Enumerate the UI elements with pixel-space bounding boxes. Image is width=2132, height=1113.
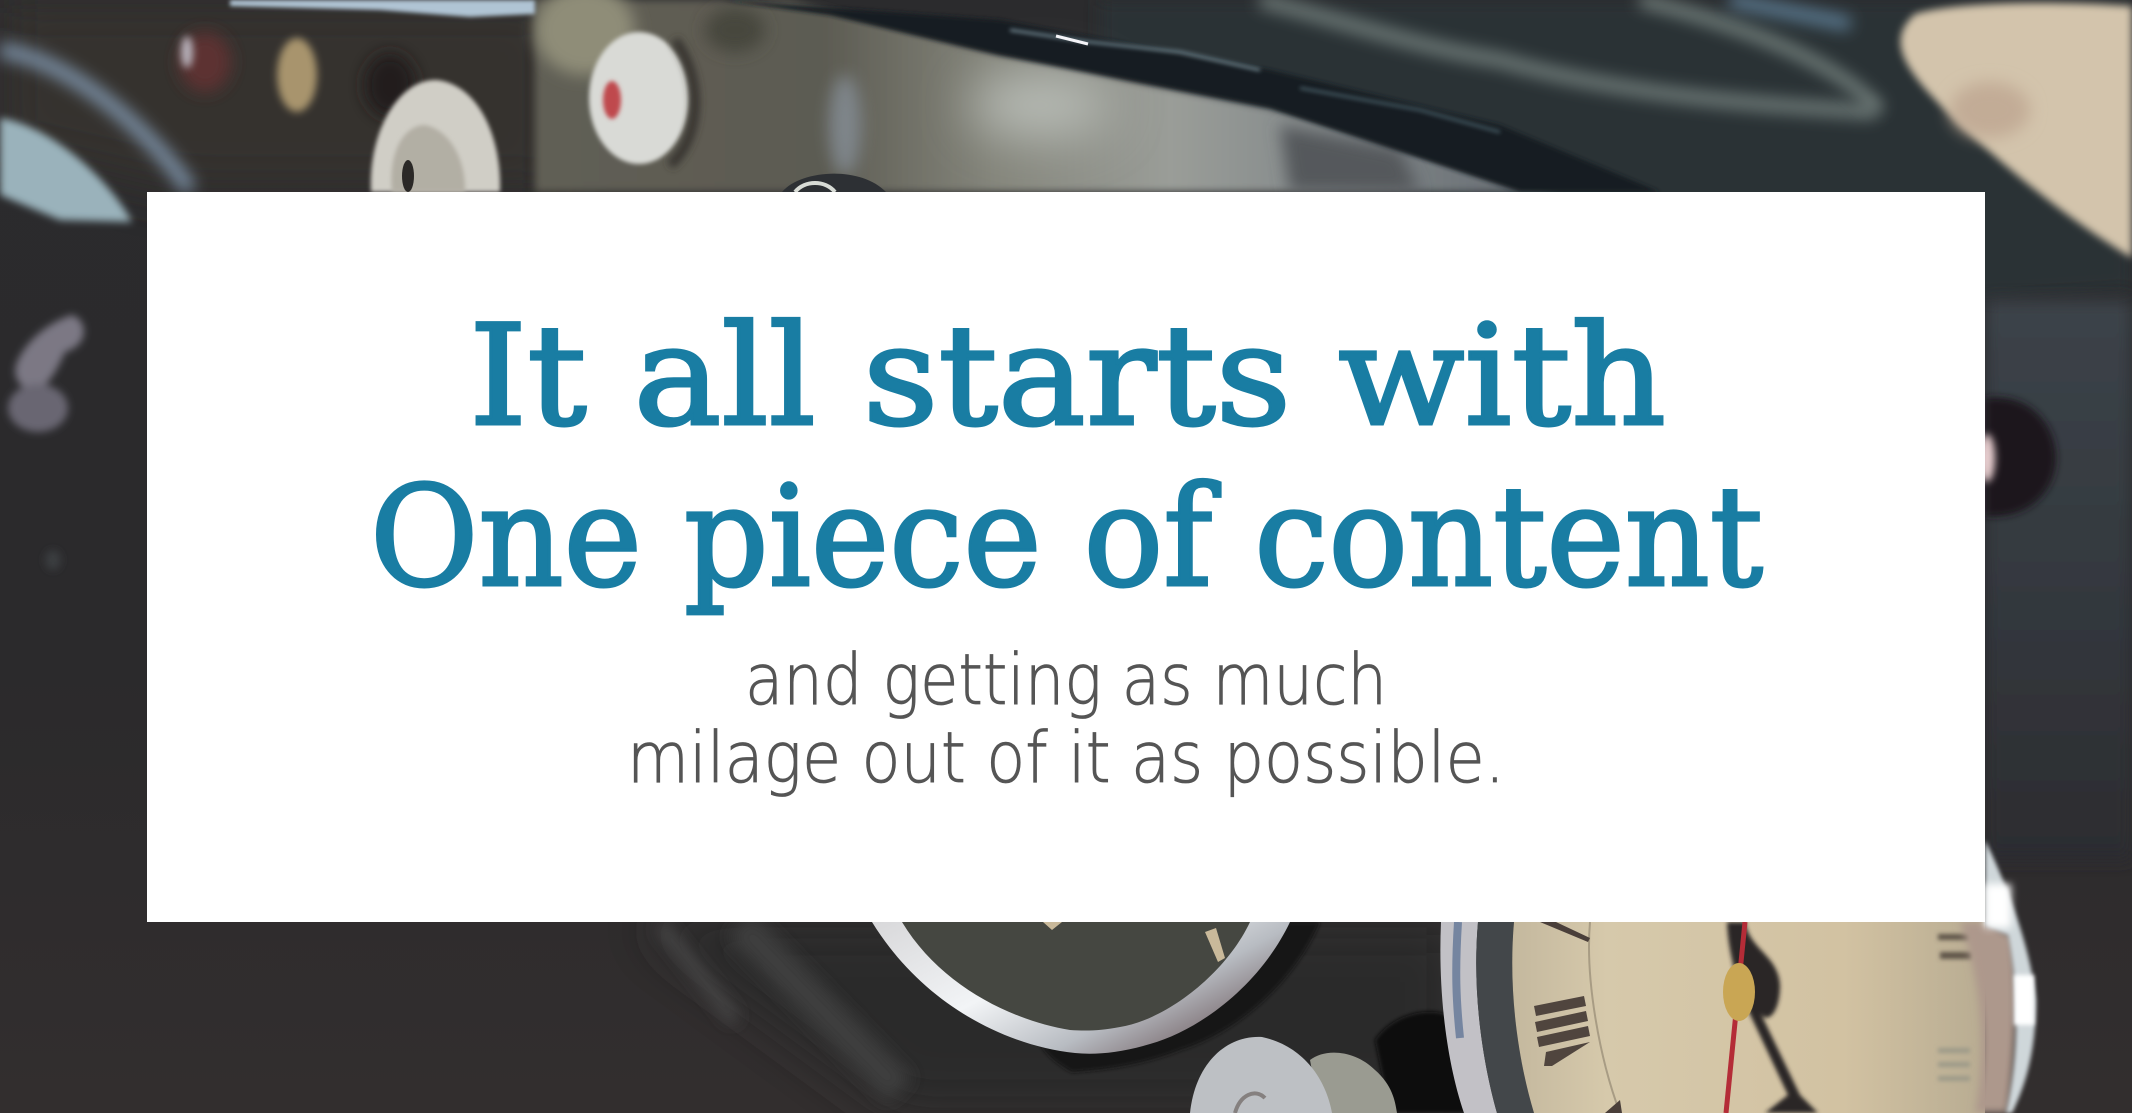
hole glow — [1979, 434, 1995, 482]
knob inner mark — [1235, 1093, 1265, 1113]
bezel white flare — [1985, 884, 2011, 928]
numeral bottom — [1605, 1100, 1622, 1113]
black shadow behind knob — [1375, 1012, 1470, 1113]
right slate column — [1985, 300, 2132, 860]
speed gauge — [872, 922, 1320, 1072]
dark hole right side — [1985, 397, 2056, 516]
gauge dark rim — [1033, 922, 1320, 1072]
trim highlights — [1010, 30, 1260, 70]
numeral lower right faded — [1938, 1048, 1970, 1081]
bezel lower flare — [2014, 975, 2034, 1025]
blue window strip — [230, 0, 535, 17]
upper reflection — [15, 315, 84, 392]
clock chrome bezel — [1440, 922, 1497, 1113]
dashboard upper right area — [1100, 0, 2132, 300]
clock inner rim — [1476, 922, 1534, 1113]
left faint ring — [45, 550, 61, 570]
panel bright patch — [970, 73, 1110, 137]
right inner bezel — [1960, 922, 2016, 1113]
lower gauge shadow streak two — [740, 925, 900, 1090]
gauge tick two — [1205, 928, 1225, 962]
white ring knob — [371, 80, 500, 192]
ring knob hole — [402, 160, 414, 192]
dashboard upper left dark area — [0, 0, 560, 192]
numeral right — [1938, 934, 1972, 959]
upper right leather seam — [1260, 0, 1875, 112]
panel shadow streak — [1280, 125, 1420, 192]
knob body — [1190, 1037, 1332, 1113]
gold hub — [1723, 963, 1755, 1021]
beige steering shape — [1901, 3, 2132, 258]
dial inner line — [1589, 922, 1620, 1113]
tan panel corner — [535, 0, 635, 75]
gauge face — [902, 922, 1250, 1031]
clock face — [1512, 922, 1985, 1113]
panel dark dent — [705, 8, 765, 52]
black socket — [364, 53, 416, 117]
numeral VIII — [1534, 996, 1590, 1066]
red knob — [179, 32, 231, 92]
right white bezel — [1985, 840, 2036, 1113]
ring knob inner — [391, 125, 465, 192]
subheading line one: and getting as much — [745, 639, 1387, 721]
red knob highlight — [181, 36, 193, 68]
beige shading — [1950, 82, 2030, 138]
gauge chrome ring — [872, 922, 1290, 1054]
heading — [370, 295, 1763, 618]
upper right seam two — [1640, 0, 1880, 110]
blue highlight — [1730, 0, 1850, 24]
numeral top — [1540, 922, 1590, 942]
white knob red dot — [603, 81, 621, 119]
lower reflection — [8, 384, 68, 432]
subheading — [627, 639, 1505, 799]
white text panel — [147, 192, 1985, 922]
knurled ring — [1310, 1053, 1397, 1113]
dark knob at panel edge — [782, 174, 886, 192]
second hand red — [1726, 922, 1745, 1113]
heading line one: It all starts with — [469, 295, 1666, 457]
grey painted panel — [535, 0, 1560, 192]
clock hand shadow — [1727, 922, 1818, 1113]
clock — [1440, 840, 2036, 1113]
trim white glint — [1056, 36, 1088, 44]
dark knob ring — [795, 183, 835, 192]
subheading line two: milage out of it as possible. — [627, 717, 1505, 799]
left gauge blue arc — [0, 50, 190, 190]
white knob shadow — [670, 40, 695, 165]
white knob — [589, 32, 689, 164]
panel blue reflection — [829, 75, 861, 175]
small chrome knob — [1190, 1012, 1470, 1113]
gauge tick one — [1043, 922, 1062, 930]
gold knob — [277, 38, 317, 112]
left reflection blobs — [8, 315, 84, 432]
lower gauge shadow streak — [660, 925, 735, 1020]
heading line two: One piece of content — [370, 456, 1763, 618]
trim second highlight — [1300, 88, 1500, 132]
lower centre dash — [640, 922, 1460, 1113]
clock bezel glint — [1456, 922, 1460, 1038]
black chrome trim — [720, 0, 1660, 192]
left gauge light blob — [0, 118, 132, 222]
